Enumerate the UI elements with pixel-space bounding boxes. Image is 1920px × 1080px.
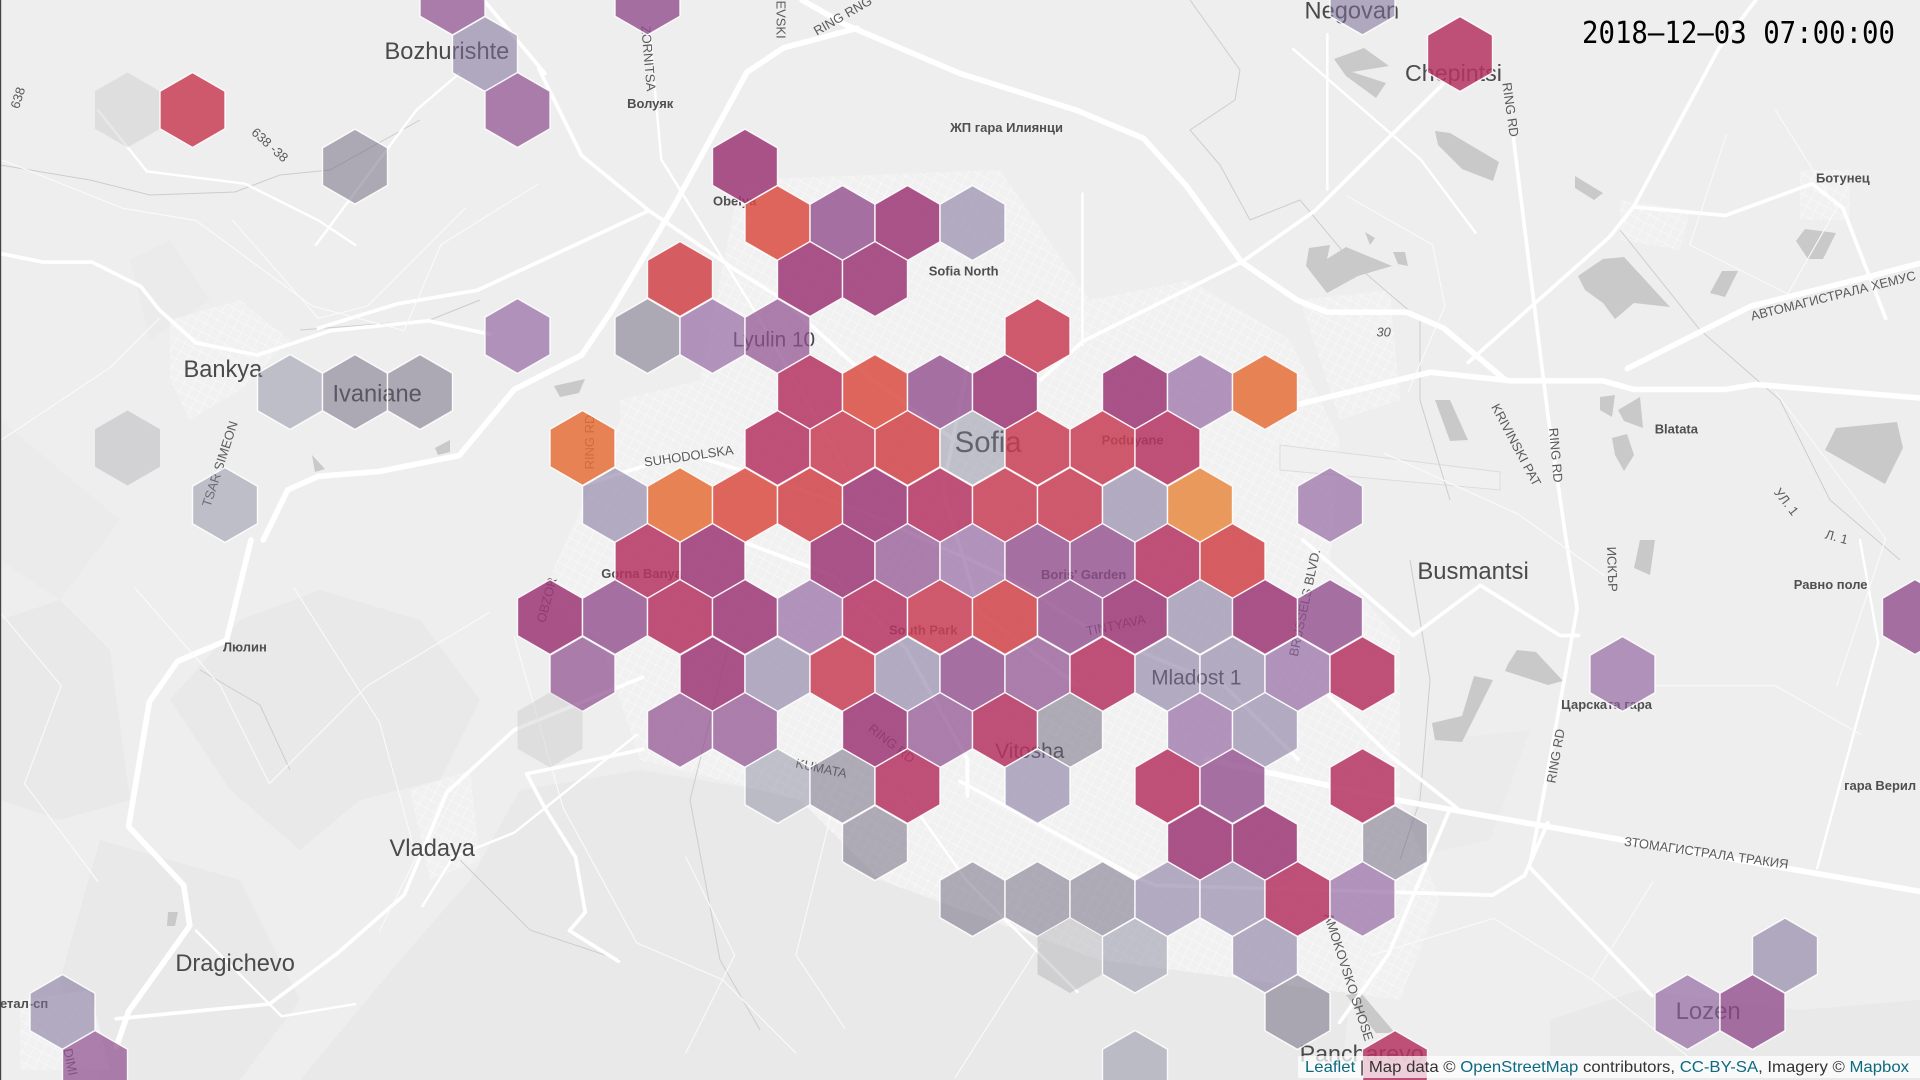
road label: Brussels Blvd: BRUSSELS BLVD. [1286,548,1323,658]
road label: ring road west: RING RD [582,415,597,469]
label: Ivaniane: Ivaniane [332,382,422,408]
label: Mladost 1: Mladost 1 [1151,666,1241,689]
road label: Tintyava: TINTYAVA [1085,611,1147,639]
label: Sofia: Sofia [955,426,1022,459]
road label: Tsar Simeon: TSAR SIMEON [199,419,241,509]
hex row 1 [420,0,1395,35]
label: South Park: South Park [889,622,958,637]
road label: ring road southeast: RING RD [1543,728,1568,784]
road label: Trakia motorway: ЗТОМАГИСТРАЛА ТРАКИЯ [1623,834,1789,872]
urban street patches [20,170,1850,1070]
road label: ring road northeast: RING RD [1499,81,1522,138]
label: Vladaya: Vladaya [390,836,476,862]
hex row 20 [62,1030,1428,1080]
label: metal station fragment: етал-сп [0,996,48,1011]
hex row 19 [30,974,1785,1050]
hex row 7 [485,298,1070,374]
hex row 16 [842,806,1428,880]
label: Busmantsi: Busmantsi [1417,558,1529,585]
label: Chepintsi: Chepintsi [1405,60,1502,86]
label: Pancharevo: Pancharevo [1300,1041,1424,1067]
attribution bar: Leaflet | Map data © OpenStreetMap contributors, CC-BY-SA, Imagery © Mapbox [1305,1059,1909,1076]
label: Lyulin: Люлин [223,639,267,654]
label: Iliyantsi station: ЖП гара Илиянци [949,120,1063,135]
road label: 30: 30 [1376,325,1392,340]
label: Volujak: Волуяк [627,96,674,111]
road label: Hemus motorway: АВТОМАГИСТРАЛА ХЕМУС [1749,268,1917,323]
label: Gorna Banya: Gorna Banya [601,566,683,581]
road label: Dimitar fragment: DIMI [60,1047,81,1077]
label: Lozen: Lozen [1676,998,1741,1025]
timestamp: 2018–12–03 07:00:00 [1582,16,1895,51]
road label: street 1 second: Л. 1 [1824,527,1850,547]
hex row 12 [518,580,1920,654]
hex row 17 [940,862,1395,936]
hex row 9 [95,410,1200,486]
road label: Zornitsa: ZORNITSA [638,25,659,92]
label: Poduyane: Poduyane [1102,432,1164,447]
hex row 11 [615,524,1265,598]
label: Dragichevo: Dragichevo [175,951,295,977]
label: Blatata: Blatata [1655,421,1699,436]
road label: Krivinski pat: KRIVINSKI PAT [1488,401,1544,489]
hex row 18 [1038,918,1818,993]
hex row 2 [452,16,1492,92]
road label: Obzor: OBZOR [533,576,560,624]
road label: 638-38: 638 -38 [249,125,291,165]
label: Vitosha: Vitosha [995,740,1065,763]
road label: Evski: EVSKI [773,0,788,39]
label: Sofia North: Sofia North [929,264,999,279]
road label: Iskar: ИСКЪР [1604,546,1621,592]
label: Ravno pole: Равно поле [1794,577,1867,592]
hex row 5 [745,186,1005,260]
label: Bozhurishte: Bozhurishte [385,39,509,65]
label: Bankya: Bankya [183,357,263,383]
hex row 13 [550,636,1655,712]
label: Botunets: Ботунец [1816,170,1870,185]
left edge line [0,0,1,1080]
road label: Samokovsko shose: AMOKOVSKO SHOSE [1321,911,1377,1043]
hex row 14 [518,692,1298,768]
road label: ring road east: RING RD [1546,427,1566,483]
hex row 6 [648,242,908,316]
road label: Kumata: KUMATA [794,755,849,781]
road label: ring road south: RING RD [866,721,918,766]
label: Tsarskata gara: Царската гара [1561,697,1653,712]
label: Lyulin 10: Lyulin 10 [733,329,815,352]
label: Obelya: Obelya [713,194,757,209]
hex row 8 [258,354,1298,430]
hex row 4 [322,129,778,204]
road label: street 1: УЛ. 1 [1771,485,1802,518]
hillshade areas [0,240,1920,1080]
hex row 10 [192,468,1362,542]
hex row 3 [95,72,550,148]
label: gara Verila: гара Верил [1844,778,1916,793]
label: Boris' Garden: Boris' Garden [1041,567,1126,582]
hex row 15 [745,748,1395,824]
road label: Suhodolska: SUHODOLSKA [643,442,735,470]
road label: 638: 638 [7,85,28,110]
